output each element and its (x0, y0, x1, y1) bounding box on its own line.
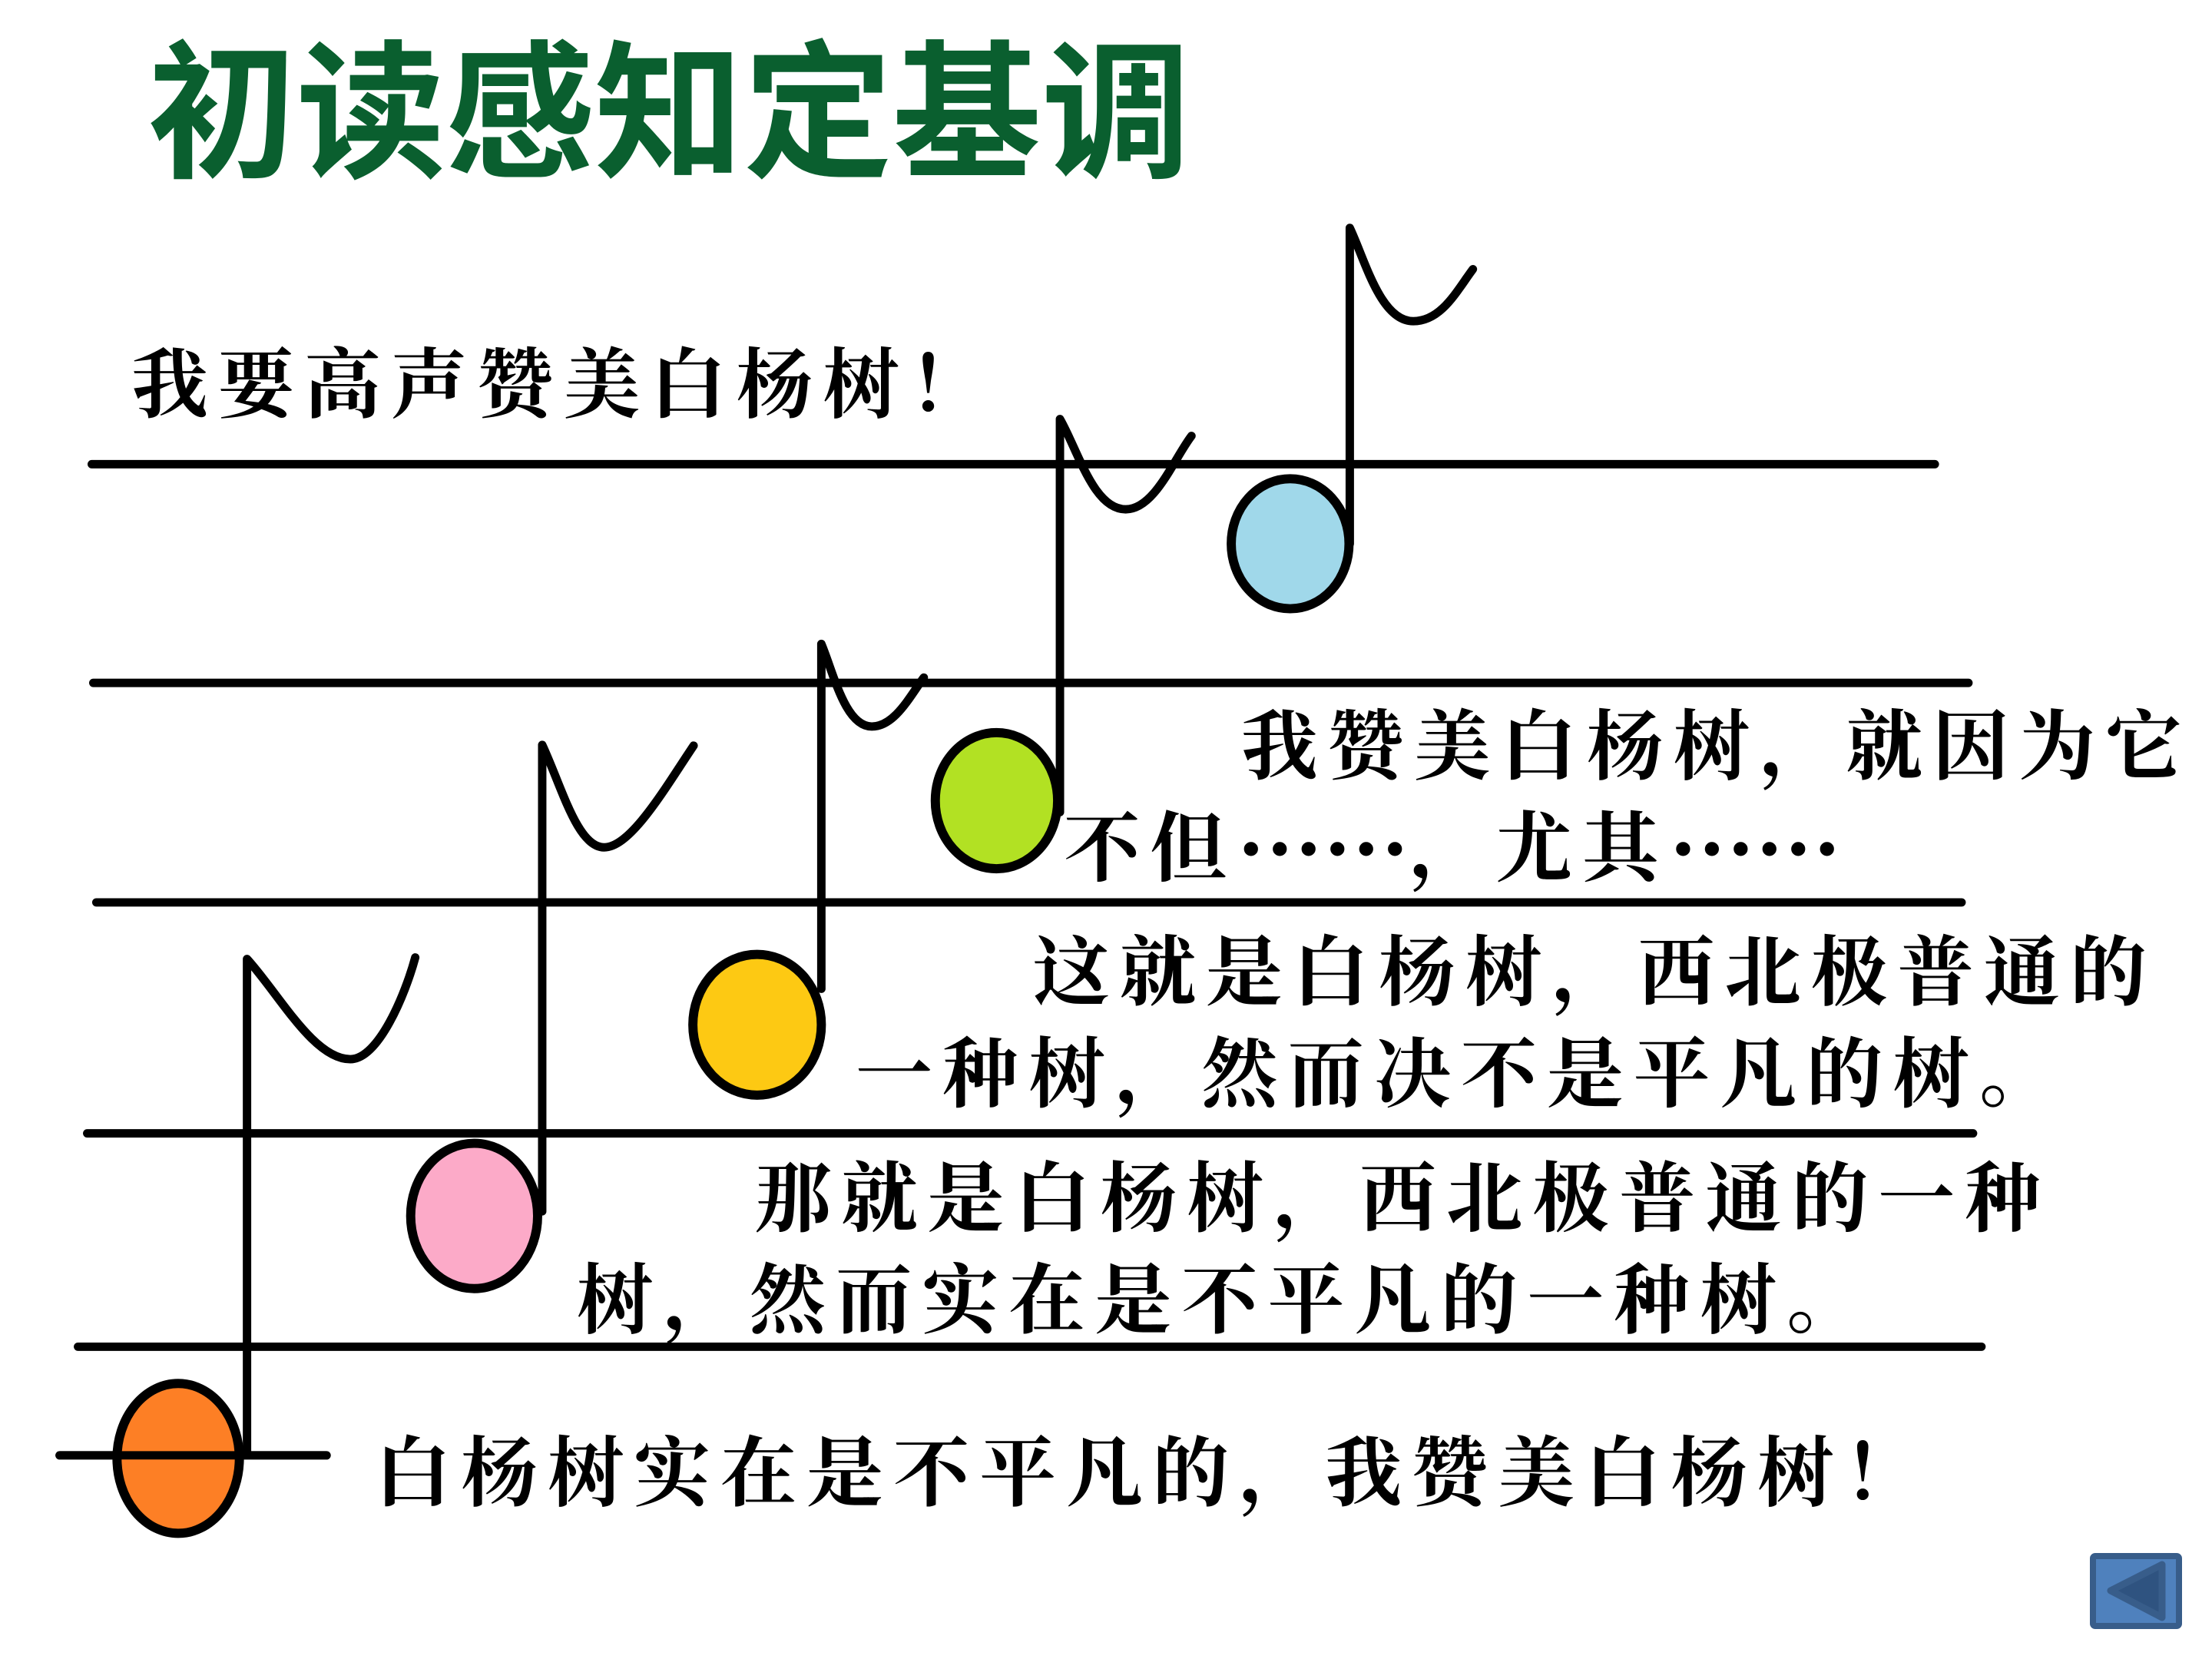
text: line 3: 这就是白杨树，西北极普通的 (1033, 911, 2157, 1021)
text: line 2: 尤其 (1496, 787, 1669, 897)
text: line 2: 我赞美白杨树，就因为它 (1241, 686, 2192, 796)
text: line 2: 不但 (1064, 787, 1237, 897)
text: line 4: 树，然而实在是不平凡的一种树。 (577, 1240, 1873, 1349)
text: line 1: 我要高声赞美白杨树！ (131, 324, 995, 434)
note 4: green (935, 419, 1191, 869)
text: line 4: 那就是白杨树，西北极普通的一种 (755, 1137, 2051, 1247)
text: line 5: 白杨树实在是不平凡的，我赞美白杨树！ (375, 1412, 1930, 1522)
text: line 2 (1064, 686, 2192, 907)
text: line 2: …… (1237, 783, 1409, 907)
staff diagram (60, 228, 2192, 1533)
note 1: orange (60, 958, 416, 1533)
text: line 3 (856, 911, 2157, 1123)
note 2: pink (411, 745, 694, 1289)
text: line 4 (577, 1137, 2051, 1349)
icon: back button (2093, 1556, 2179, 1626)
text: line 2: …… (1669, 783, 1842, 907)
note 5: blue (1231, 228, 1473, 609)
text: line 3: 一种树，然而决不是平凡的树。 (856, 1013, 2065, 1123)
note 3: yellow (693, 644, 924, 1095)
text: line 2: ， (1409, 787, 1496, 897)
title: 初读感知定基调 (147, 31, 1190, 198)
staff lines (60, 464, 1982, 1455)
